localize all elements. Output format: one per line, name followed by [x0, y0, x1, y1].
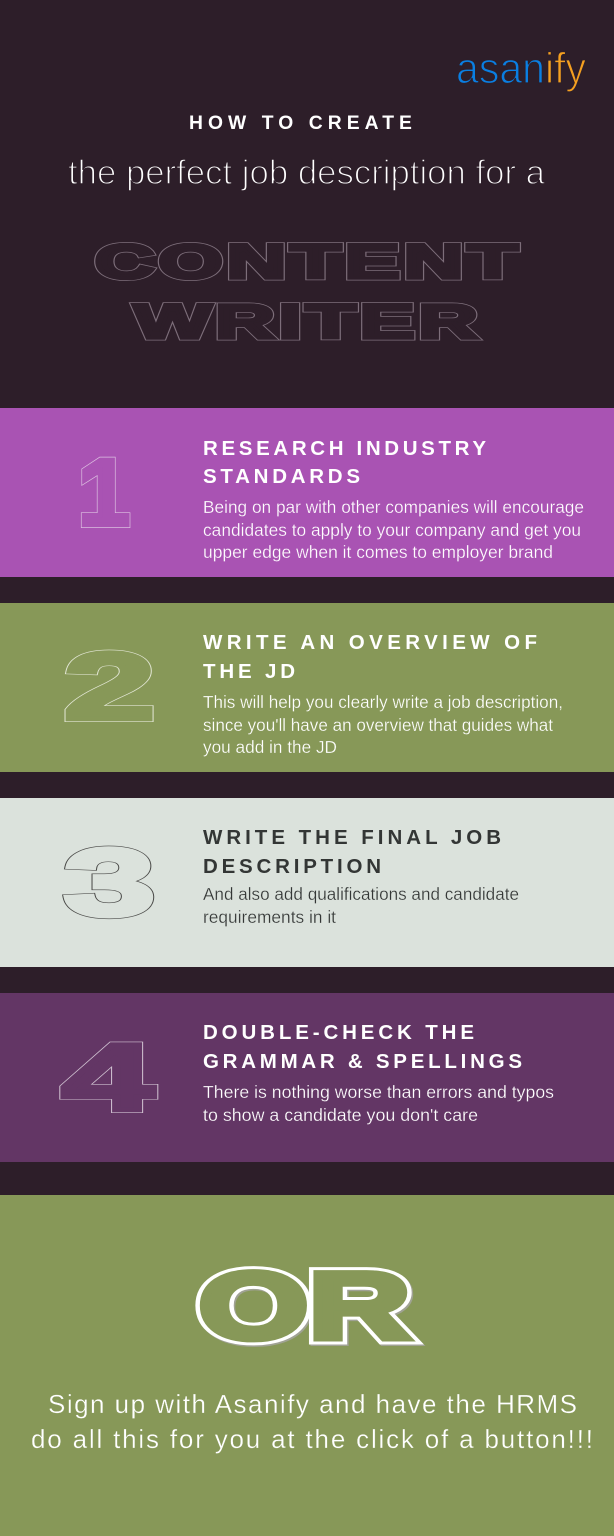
heading: content writer outlined: WRITER [134, 296, 482, 349]
number 4: 4 [62, 1025, 154, 1131]
step 1 text: upper edge when it comes to employer brand [203, 542, 553, 562]
logo: asanify: asanify [456, 44, 586, 93]
step 4 heading: DOUBLE-CHECK THE [203, 1021, 474, 1044]
panel: or call to action [0, 1195, 614, 1536]
step 3 heading: DESCRIPTION [203, 855, 381, 878]
step 3 heading [203, 826, 501, 878]
panel: step 3 [0, 798, 614, 967]
number 2 [64, 634, 155, 740]
subtitle: the perfect job description for a [68, 154, 545, 192]
step 3 text [203, 884, 519, 927]
step 1 text: candidates to apply to your company and get you [203, 520, 581, 540]
panel: step 2 [0, 603, 614, 772]
panel: step 1 [0, 408, 614, 577]
call to action text: do all this for you at the click of a button!!! [31, 1424, 593, 1454]
step 4 heading [203, 1021, 522, 1073]
step 2 text: This will help you clearly write a job description, [203, 692, 563, 712]
title: how to create: HOW TO CREATE [189, 113, 417, 134]
number 2: 2 [64, 634, 155, 740]
step 2 text: you add in the JD [203, 737, 337, 757]
number 3 [64, 830, 155, 936]
step 3 heading: WRITE THE FINAL JOB [203, 826, 501, 849]
or outlined heading [198, 1254, 412, 1361]
step 1 heading: RESEARCH INDUSTRY [203, 437, 486, 460]
panel: step 4 [0, 993, 614, 1162]
step 2 text: since you'll have an overview that guides what [203, 715, 553, 735]
step 3 text: requirements in it [203, 907, 336, 927]
number 1: 1 [78, 440, 130, 546]
or outlined heading: OR [198, 1254, 410, 1360]
step 4 text: to show a candidate you don't care [203, 1105, 478, 1125]
number 4 [62, 1025, 154, 1131]
step 1 text: Being on par with other companies will encourage [203, 497, 584, 517]
step 2 heading [203, 631, 537, 683]
or outlined heading: OR [198, 1254, 410, 1360]
step 2 text [203, 692, 563, 757]
step 4 text: There is nothing worse than errors and typos [203, 1082, 554, 1102]
step 2 heading: WRITE AN OVERVIEW OF [203, 631, 537, 654]
call to action text [31, 1389, 593, 1454]
or outlined heading: OR [200, 1255, 412, 1361]
step 4 heading: GRAMMAR & SPELLINGS [203, 1050, 522, 1073]
number 2: 2 [64, 634, 155, 740]
step 1 heading [203, 437, 486, 488]
number 3: 3 [64, 830, 155, 936]
number 1: 1 [78, 440, 130, 546]
step 3 text: And also add qualifications and candidate [203, 884, 519, 904]
heading: content writer outlined: CONTENT [95, 236, 522, 289]
step 1 text [203, 497, 584, 562]
number 3: 3 [64, 830, 155, 936]
call to action text: Sign up with Asanify and have the HRMS [48, 1389, 577, 1419]
number 4: 4 [62, 1025, 154, 1131]
heading: content writer outlined: WRITER [134, 296, 482, 349]
step 4 text [203, 1082, 554, 1125]
heading: content writer outlined [95, 236, 522, 349]
step 1 heading: STANDARDS [203, 465, 360, 488]
heading: content writer outlined: CONTENT [95, 236, 522, 289]
step 2 heading: THE JD [203, 660, 295, 683]
